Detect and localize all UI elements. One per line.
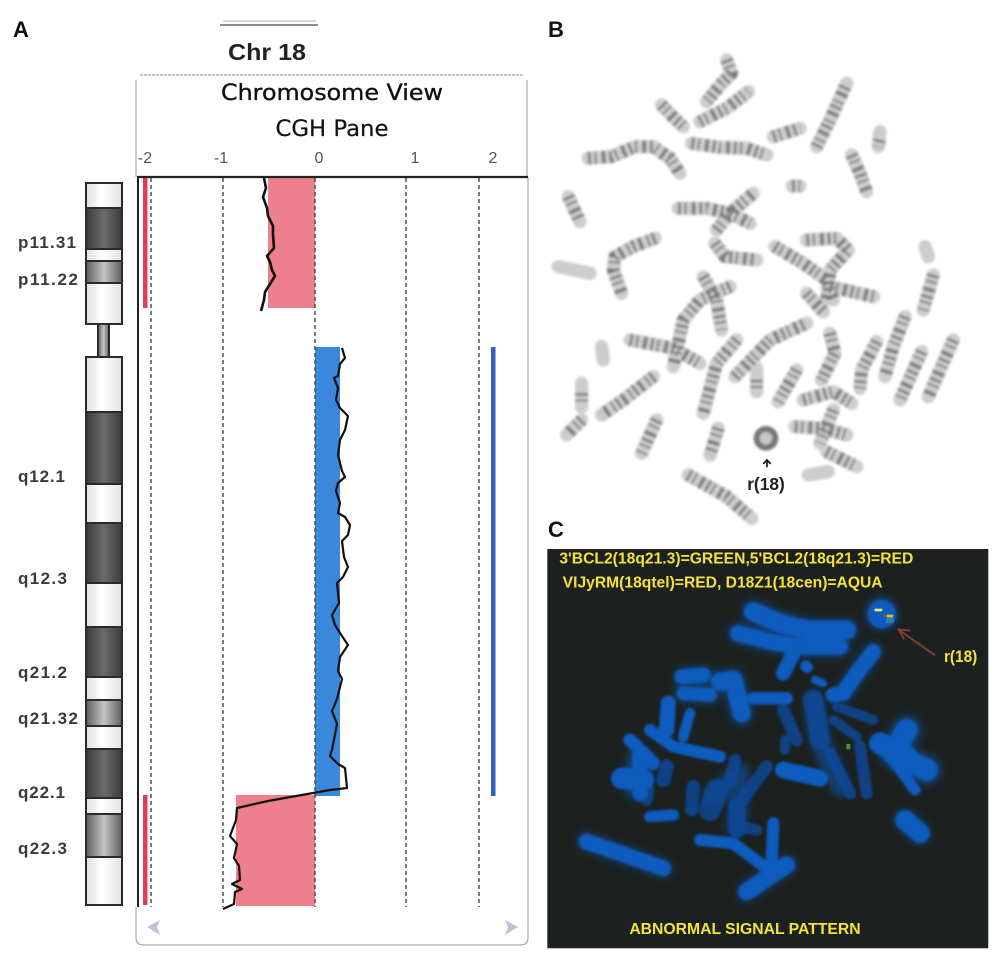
pane frame (136, 75, 528, 945)
axis tick labels: 0 (315, 150, 324, 167)
dim chromosomes in the crowded centre (647, 700, 873, 830)
axis tick labels: -1 (214, 150, 228, 167)
bright chromosomes (587, 612, 927, 892)
blue gain area (315, 347, 340, 796)
band labels: p11.22 (18, 270, 78, 289)
axis tick labels: 2 (489, 150, 498, 167)
axis tick labels: 1 (411, 150, 420, 167)
FISH signal near centre (846, 744, 850, 749)
dark image background (547, 549, 988, 948)
chromosome title: Chr 18 (228, 39, 306, 65)
band labels: q12.1 (18, 467, 65, 486)
panel A: chromosome 18 CGH view (18, 21, 528, 945)
axis tick labels (138, 150, 498, 167)
axis lines (137, 177, 528, 907)
pane subtitle: CGH Pane: CGH Pane (276, 117, 388, 142)
arrow to r(18) (899, 629, 935, 655)
ideogram of chromosome 18 (86, 183, 122, 905)
band labels: q22.1 (18, 783, 65, 802)
pane title: Chromosome View: Chromosome View (221, 81, 443, 106)
band labels: q21.32 (18, 709, 78, 728)
panel C: FISH image (547, 549, 988, 948)
blue gain indicator bar (491, 347, 496, 796)
chromosome glow (587, 612, 927, 892)
header rule above chromosome title (220, 21, 318, 25)
chromosomes base shapes (558, 60, 953, 518)
axis tick labels: -2 (138, 150, 152, 167)
band labels: q12.3 (18, 569, 67, 588)
label r(18): r(18) (747, 474, 785, 494)
panel label A: A (13, 17, 29, 42)
arrow to ring chromosome (763, 460, 771, 467)
band labels: q21.2 (18, 663, 67, 682)
chromosome dark bands (567, 60, 953, 518)
pink deletion areas (236, 178, 315, 906)
label r(18): r(18) (944, 647, 977, 666)
log ratio profile, p arm (261, 178, 275, 311)
band labels (18, 233, 78, 858)
band labels: q22.3 (18, 839, 67, 858)
log ratio profile, q arm (223, 348, 350, 909)
panel label B: B (548, 17, 564, 42)
FISH signals on r(18) (874, 609, 894, 623)
panel label C: C (548, 517, 564, 542)
ring chromosome 18 (757, 429, 775, 448)
probe legend, line 2: VIJyRM(18qtel)=RED, D18Z1(18cen)=AQUA (563, 575, 883, 592)
panel B: banded metaphase spread (558, 60, 953, 518)
red loss indicator bars (143, 178, 148, 905)
probe legend, line 1: 3'BCL2(18q21.3)=GREEN,5'BCL2(18q21.3)=RED (559, 550, 913, 567)
scroll arrows (147, 920, 518, 935)
caption: abnormal signal pattern: ABNORMAL SIGNAL PATTERN (629, 921, 861, 938)
band labels: p11.31 (18, 233, 76, 252)
